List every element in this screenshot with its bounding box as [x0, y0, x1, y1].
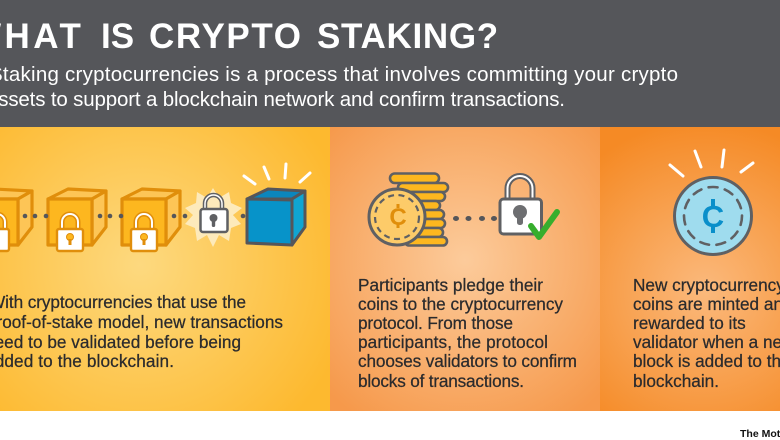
icon: locked block 2: [48, 189, 106, 251]
text: validators explanation: blocks of transactions.: [358, 371, 524, 391]
title: IS: [101, 17, 134, 56]
text: validators explanation: protocol. From those: [358, 313, 513, 333]
text: validators explanation: coins to the cryptocurrency: [358, 294, 563, 314]
text: validators explanation: [358, 275, 577, 391]
intro text: Staking cryptocurrencies is a process that involves committing your crypto: [0, 63, 678, 86]
text: rewards explanation: [633, 275, 780, 391]
title: STAKING?: [317, 17, 499, 56]
panel: proof-of-stake: [0, 127, 330, 411]
icon: blue block: [247, 189, 305, 245]
text: validators explanation: chooses validators to confirm: [358, 351, 577, 371]
icon: locked block 3: [122, 189, 180, 251]
icon: blue coin: C: [702, 199, 724, 234]
panel: rewards: [600, 127, 780, 411]
icon: blue coin: [674, 178, 752, 254]
intro text: assets to support a blockchain network and confirm transactions.: [0, 88, 565, 111]
text: validators explanation: Participants pledge their: [358, 275, 543, 295]
text: rewards explanation: blockchain.: [633, 371, 719, 391]
panel: validators: [330, 127, 600, 411]
title: CRYPTO: [149, 17, 303, 56]
header band: [0, 0, 780, 127]
text: rewards explanation: rewarded to its: [633, 313, 746, 333]
chain dots: [23, 214, 245, 218]
icon: coin stack: C: [389, 204, 407, 231]
icon: coin stack: [369, 174, 448, 246]
chain dots: [453, 216, 497, 221]
icon: padlock with check: [500, 176, 557, 237]
text: proof-of-stake explanation: [0, 292, 283, 371]
icon: glowing lock: [185, 188, 242, 247]
icon: locked block 1: [0, 189, 32, 251]
icon: coin rays: [670, 150, 753, 176]
icon: block rays: [244, 164, 310, 184]
text: validators explanation: participants, the protocol: [358, 332, 548, 352]
intro text: [0, 63, 678, 111]
title: [0, 17, 499, 56]
